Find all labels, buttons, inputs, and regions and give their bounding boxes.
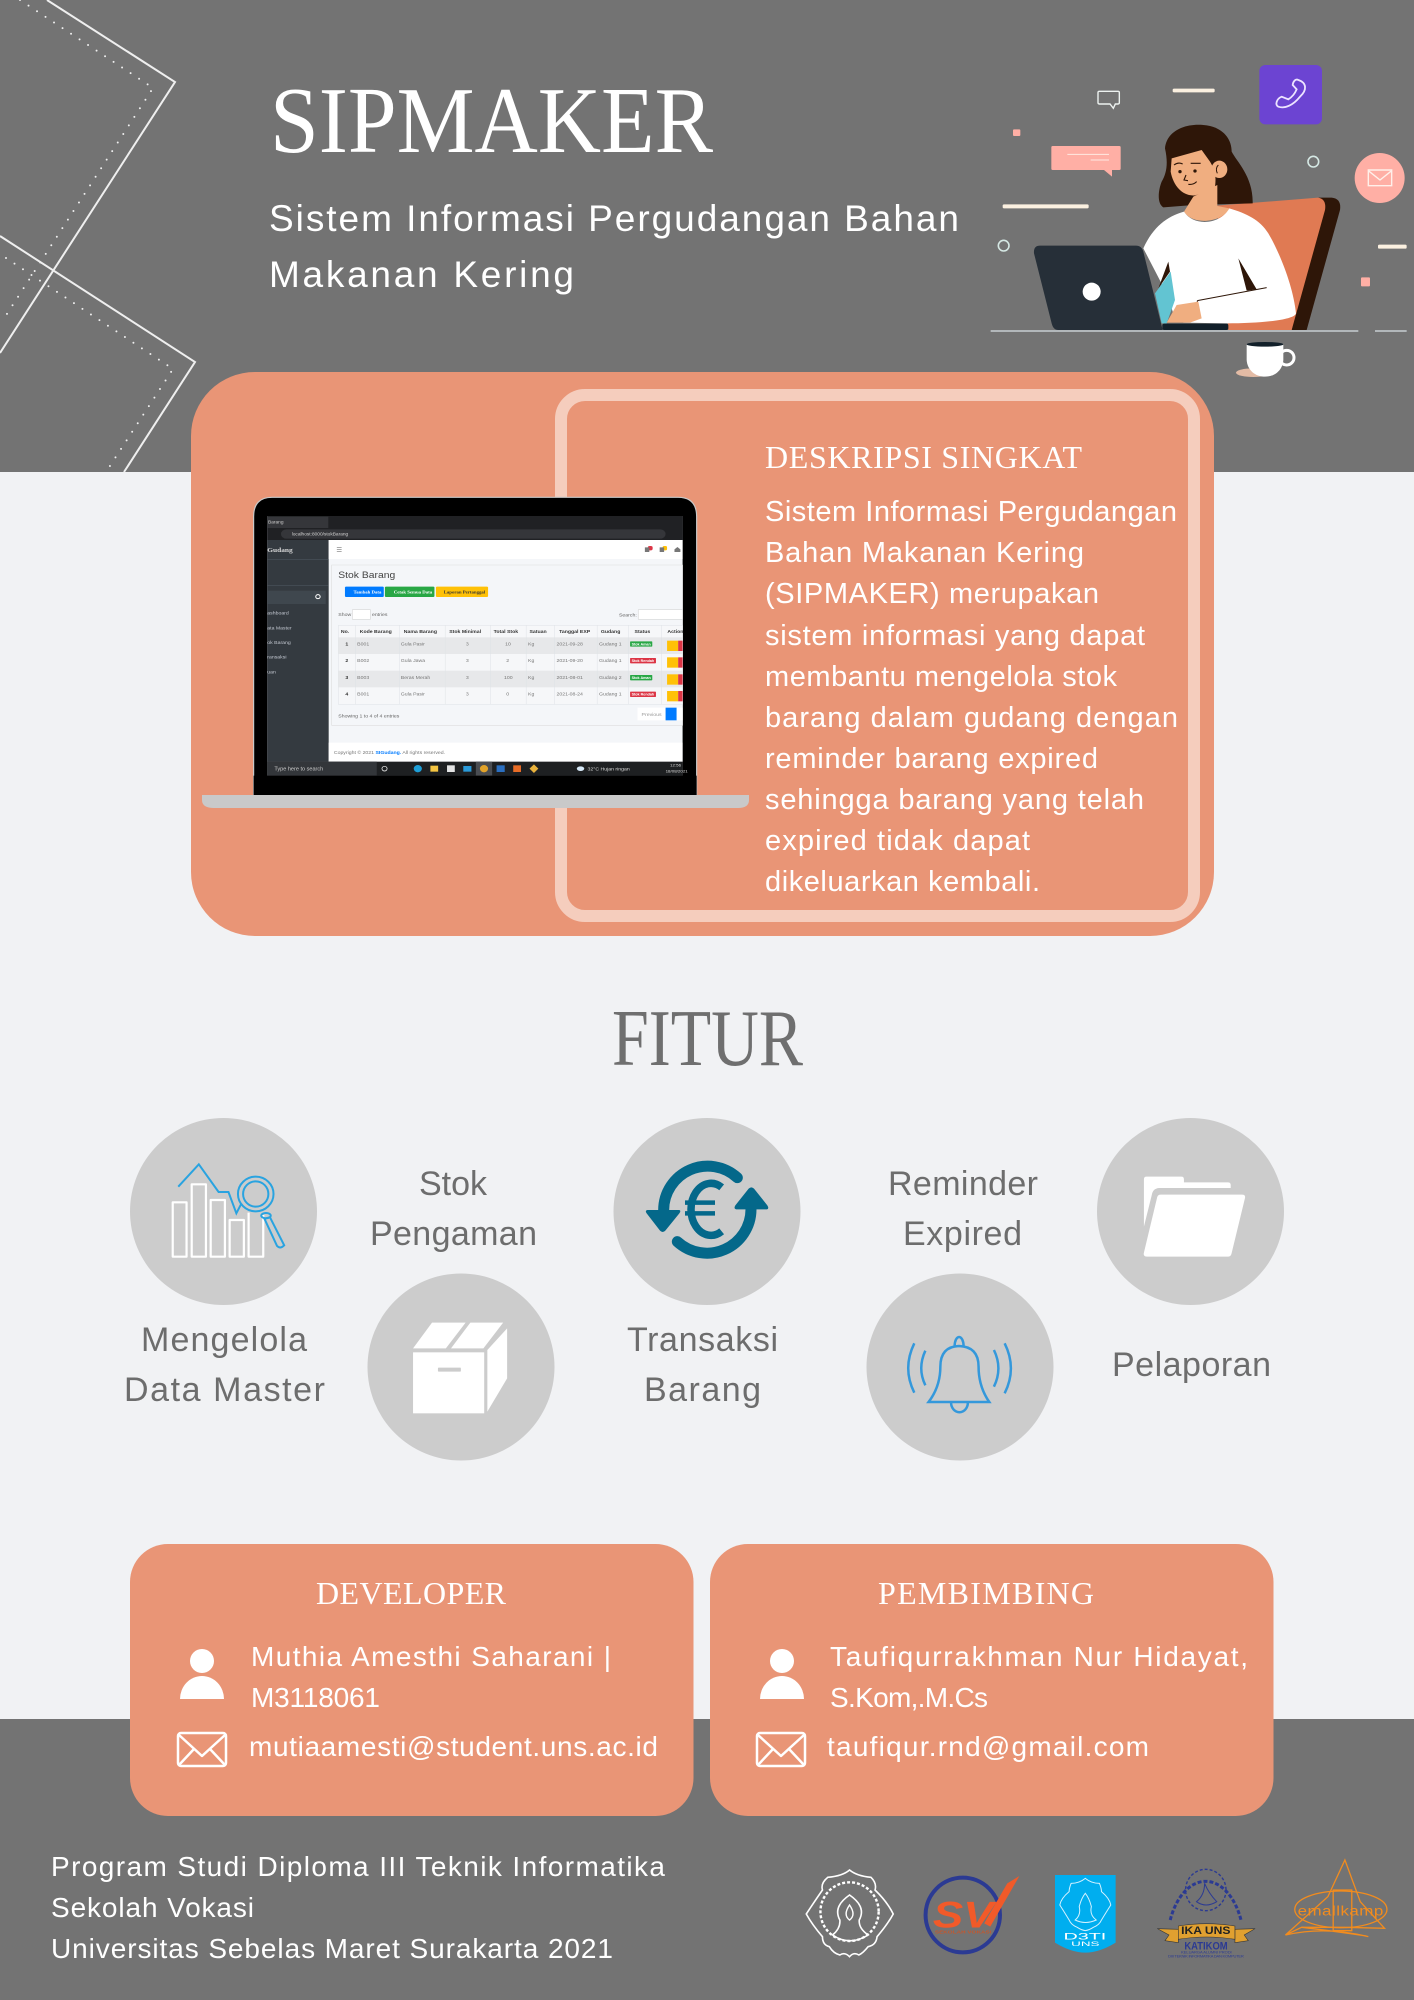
laptop screenshot: Gudang: [267, 546, 293, 554]
laptop screenshot: Gudang 1: [599, 642, 622, 647]
icon: chat outline: [1098, 91, 1119, 108]
logos: [806, 1860, 1387, 1959]
description text: [765, 496, 1178, 898]
laptop screenshot: 32°C Hujan ringan: [588, 767, 630, 773]
feature: pelaporan: Pelaporan: [1112, 1346, 1271, 1384]
feature: reminder expired: Expired: [903, 1215, 1022, 1253]
chair: [1217, 198, 1340, 330]
description text: sehingga barang yang telah: [765, 784, 1144, 816]
description text: (SIPMAKER) merupakan: [765, 578, 1099, 610]
icon: pink speech bubble: [1051, 146, 1121, 177]
description text: sistem informasi yang dapat: [765, 620, 1145, 652]
feature: reminder expired: Reminder: [888, 1165, 1038, 1203]
icon: chart with magnifier: [173, 1164, 284, 1257]
laptop screenshot: B001: [357, 692, 369, 698]
laptop screenshot: ransaksi: [267, 655, 286, 661]
subtitle: [269, 198, 959, 295]
laptop screenshot: 2021-09-28: [556, 642, 583, 647]
laptop screenshot: 3: [466, 642, 469, 647]
laptop screenshot: Search:: [619, 613, 637, 619]
laptop screenshot: Action: [667, 629, 683, 635]
footer institution text: Sekolah Vokasi: [51, 1892, 254, 1923]
laptop screenshot: 2021-09-20: [556, 658, 583, 664]
laptop screenshot: 1: [345, 642, 348, 647]
laptop screenshot: 3: [345, 675, 348, 681]
supervisor name: S.Kom,.M.Cs: [830, 1682, 988, 1713]
heading: fitur: FITUR: [612, 995, 804, 1083]
laptop screenshot: Kg: [528, 642, 535, 647]
laptop screenshot: Laporan Pertanggal: [444, 590, 486, 594]
laptop screenshot: 2021-08-24: [556, 692, 583, 698]
laptop screenshot: Gula Pasir: [401, 642, 425, 647]
laptop screenshot: B002: [357, 658, 369, 664]
woman: [1143, 125, 1296, 323]
supervisor email: taufiqur.rnd@gmail.com: [827, 1731, 1149, 1762]
laptop screenshot: 3: [466, 658, 469, 664]
logo: emallkamp: emallkamp: [1298, 1904, 1383, 1919]
laptop screenshot: Show: [338, 612, 352, 618]
laptop screenshot: Beras Merah: [401, 675, 431, 681]
laptop screenshot: Kg: [528, 692, 535, 698]
laptop screenshot: Gudang: [601, 629, 620, 635]
logo: IKA UNS: IKA UNS: [1181, 1924, 1231, 1937]
coffee cup: [1236, 342, 1294, 377]
heading: developer: DEVELOPER: [316, 1575, 507, 1611]
developer name: [251, 1641, 611, 1713]
description text: Sistem Informasi Pergudangan: [765, 496, 1177, 528]
title: SIPMAKER: [270, 69, 713, 173]
feature: transaksi barang: Barang: [644, 1371, 761, 1409]
supervisor name: [830, 1641, 1248, 1713]
laptop screenshot: Gudang 1: [599, 692, 622, 698]
logo: IKA UNS: KATIKOM: [1184, 1939, 1228, 1952]
laptop screenshot: [254, 497, 697, 795]
developer name: Muthia Amesthi Saharani |: [251, 1641, 611, 1672]
laptop screenshot: Type here to search: [274, 767, 323, 772]
footer band: [0, 1719, 1414, 2000]
feature: transaksi barang: [614, 1118, 800, 1409]
feature: mengelola data master: Mengelola: [141, 1321, 307, 1359]
icon: euro exchange: [646, 1166, 768, 1253]
icon: person: [760, 1649, 804, 1699]
description text: dikeluarkan kembali.: [765, 866, 1040, 898]
desk line: [991, 330, 1407, 332]
footer institution text: [51, 1851, 665, 1964]
logo: SV: [926, 1876, 1019, 1952]
laptop screenshot: 10: [505, 642, 511, 647]
description text: membantu mengelola stok: [765, 661, 1118, 693]
logo: D3TI: D3TI: [1063, 1932, 1106, 1942]
laptop: [1034, 246, 1228, 330]
developer name: M3118061: [251, 1682, 380, 1713]
laptop screenshot: Stok Aman: [632, 676, 651, 680]
logo: SV: SV: [933, 1893, 997, 1935]
laptop screenshot: 0: [506, 692, 509, 698]
laptop screenshot: Copyright © 2021 SIGudang. All rights reserved.: [334, 749, 445, 756]
laptop screenshot: ok Barang: [267, 640, 291, 646]
laptop screenshot: 12:56: [670, 763, 682, 768]
subtitle: Makanan Kering: [269, 254, 574, 295]
feature: stok pengaman: [368, 1165, 554, 1460]
description text: expired tidak dapat: [765, 825, 1030, 857]
laptop screenshot: 2021-08-01: [556, 675, 583, 681]
laptop screenshot: uan: [267, 670, 276, 675]
icon: folder: [1144, 1177, 1245, 1257]
laptop screenshot: localhost:8000/stokBarang: [292, 532, 349, 536]
card: developer: [130, 1544, 694, 1816]
laptop screenshot: 2: [506, 658, 509, 664]
card: pembimbing: [710, 1544, 1274, 1816]
laptop screenshot: Stok Aman: [632, 642, 651, 646]
logo: D3TI: UNS: [1071, 1940, 1100, 1948]
developer email: mutiaamesti@student.uns.ac.id: [249, 1731, 658, 1762]
icon: box: [413, 1323, 507, 1413]
laptop screenshot: ashboard: [267, 611, 289, 617]
laptop screenshot: entries: [372, 612, 388, 618]
feature: reminder expired: [866, 1165, 1054, 1460]
laptop screenshot: Kg: [528, 658, 535, 664]
icon: mail: [178, 1733, 226, 1766]
laptop screenshot: Stok Barang: [338, 570, 395, 581]
description text: barang dalam gudang dengan: [765, 702, 1178, 734]
supervisor name: Taufiqurrakhman Nur Hidayat,: [830, 1641, 1248, 1672]
subtitle: Sistem Informasi Pergudangan Bahan: [269, 198, 959, 239]
footer institution text: Universitas Sebelas Maret Surakarta 2021: [51, 1933, 613, 1964]
decorative outlined squares: [0, 0, 195, 472]
laptop screenshot: Gula Jawa: [401, 658, 425, 664]
laptop screenshot: Tanggal EXP: [559, 629, 591, 635]
decorative bars and dots: [998, 89, 1407, 286]
icon: person: [180, 1649, 224, 1699]
laptop screenshot: Tambah Data: [353, 590, 382, 594]
laptop screenshot: Barang: [268, 520, 284, 525]
laptop screenshot: Status: [635, 629, 651, 635]
icon: mail: [757, 1733, 805, 1766]
laptop screenshot: Gudang 1: [599, 658, 622, 664]
laptop screenshot: Previous: [642, 712, 662, 718]
laptop screenshot: B003: [357, 675, 369, 681]
laptop screenshot: 4: [345, 692, 348, 698]
footer institution text: Program Studi Diploma III Teknik Informatika: [51, 1851, 665, 1882]
icon: mail circle: [1355, 153, 1405, 203]
laptop screenshot: Stok Rendah: [632, 693, 654, 697]
feature: transaksi barang: Transaksi: [627, 1321, 778, 1359]
description text: Bahan Makanan Kering: [765, 537, 1084, 569]
laptop screenshot: 3: [466, 692, 469, 698]
logo: D3TI: [1055, 1875, 1116, 1953]
laptop screenshot: No.: [341, 629, 350, 635]
feature: stok pengaman: Pengaman: [370, 1215, 537, 1253]
laptop base: [202, 795, 749, 808]
description text: reminder barang expired: [765, 743, 1098, 775]
laptop screenshot: B001: [357, 642, 369, 647]
laptop screenshot: Showing 1 to 4 of 4 entries: [338, 714, 400, 719]
illustration: woman at laptop: [991, 65, 1407, 377]
icon: phone tile: [1259, 65, 1322, 124]
laptop screenshot: Kg: [528, 675, 535, 681]
laptop screenshot: Gudang 2: [599, 675, 622, 681]
panel: description: [191, 372, 1214, 936]
laptop screenshot: Stok Rendah: [632, 659, 654, 663]
logo: IKA UNS: DIII TEKNIK INFORMATIKA DAN KOMPUTER: [1168, 1955, 1244, 1959]
logo: IKA UNS: [1157, 1869, 1255, 1959]
logo: SV: SEKOLAH VOKASI: [935, 1930, 992, 1935]
header band: [0, 0, 1414, 472]
feature: stok pengaman: Stok: [419, 1165, 488, 1203]
feature: mengelola data master: [124, 1118, 325, 1409]
laptop screenshot: Stok Minimal: [449, 629, 482, 635]
logo: UNS: [806, 1870, 893, 1957]
laptop screenshot: Total Stok: [494, 629, 518, 635]
inner outlined frame: [561, 395, 1194, 916]
feature: mengelola data master: Data Master: [124, 1371, 325, 1409]
laptop screenshot: Nama Barang: [404, 629, 437, 635]
laptop screenshot: 2: [345, 658, 348, 664]
laptop screenshot: 3: [466, 675, 469, 681]
laptop screenshot: Gula Pasir: [401, 692, 425, 698]
heading: deskripsi singkat: DESKRIPSI SINGKAT: [765, 439, 1082, 475]
laptop screenshot: ata Master: [267, 626, 292, 631]
feature: pelaporan: [1097, 1118, 1284, 1384]
laptop screenshot: 18/08/2021: [666, 769, 688, 774]
logo: emallkamp: [1285, 1860, 1387, 1937]
laptop screenshot: Satuan: [529, 629, 547, 635]
laptop screenshot: Cetak Semua Data: [394, 590, 433, 594]
icon: bell: [908, 1337, 1011, 1412]
logo: IKA UNS: KELUARGA ALUMNI PRODI: [1181, 1951, 1232, 1955]
laptop screenshot: Kode Barang: [360, 629, 392, 635]
heading: pembimbing: PEMBIMBING: [878, 1575, 1094, 1611]
laptop screenshot: 100: [504, 675, 513, 681]
